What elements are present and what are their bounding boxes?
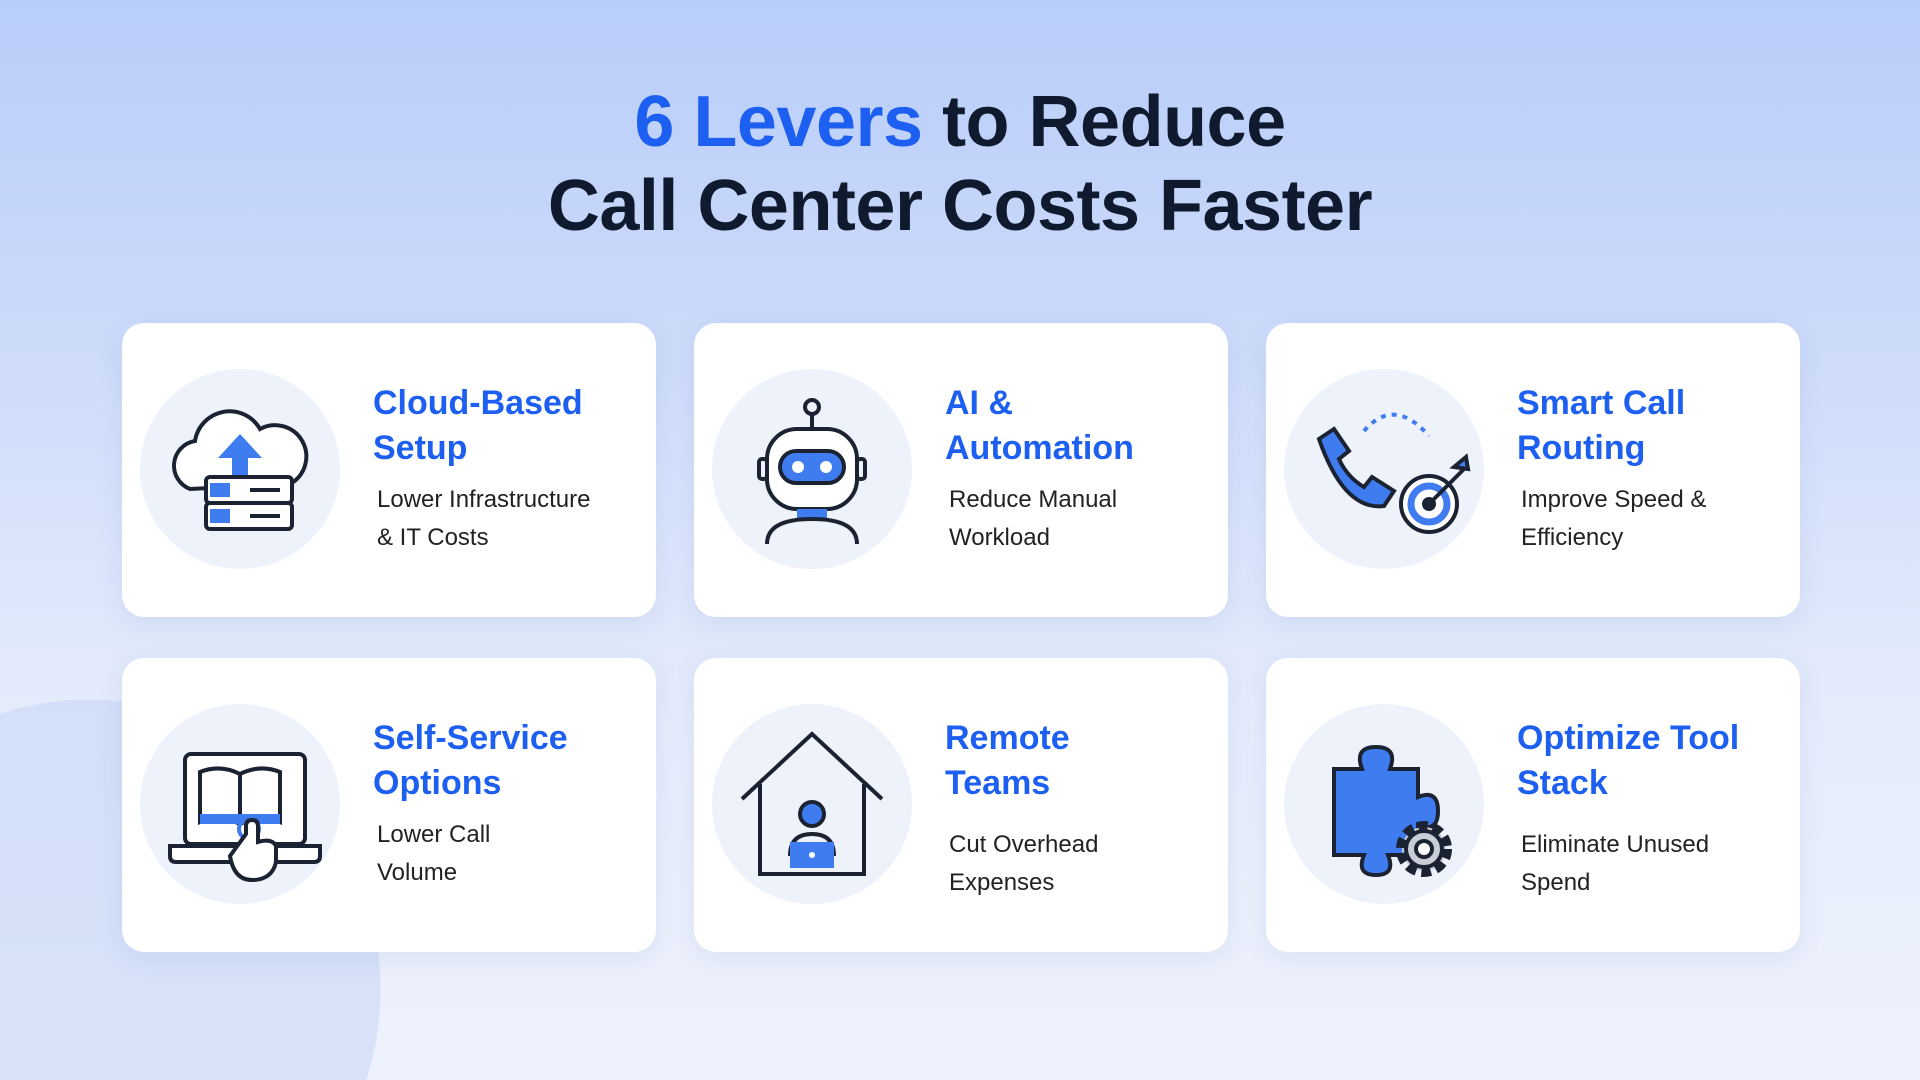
- heading: [373, 719, 568, 802]
- heading: Automation: [945, 429, 1134, 467]
- heading: Setup: [373, 429, 467, 467]
- text: Volume: [377, 859, 457, 886]
- text: & IT Costs: [377, 524, 489, 551]
- heading: [945, 384, 1134, 467]
- title: 6 Levers to Reduce: [634, 82, 1286, 162]
- heading: Routing: [1517, 429, 1645, 467]
- heading: Cloud-Based: [373, 384, 583, 422]
- text: Eliminate Unused: [1521, 831, 1709, 858]
- heading: AI &: [945, 384, 1013, 422]
- icon: house with worker: [712, 704, 912, 904]
- icon: robot: [712, 369, 912, 569]
- text: Workload: [949, 524, 1050, 551]
- text: Cut Overhead: [949, 831, 1098, 858]
- panel: optimize tool stack: [1266, 658, 1800, 952]
- heading: Teams: [945, 764, 1050, 802]
- heading: Stack: [1517, 764, 1608, 802]
- title: [548, 82, 1372, 246]
- heading: Self-Service: [373, 719, 568, 757]
- text: Spend: [1521, 869, 1590, 896]
- heading: [945, 719, 1070, 802]
- heading: Optimize Tool: [1517, 719, 1739, 757]
- heading: [1517, 719, 1739, 802]
- heading: Remote: [945, 719, 1070, 757]
- panel: self-service: [122, 658, 656, 952]
- text: [377, 821, 490, 886]
- heading: [373, 384, 583, 467]
- panel: smart call routing: [1266, 323, 1800, 617]
- text: Lower Call: [377, 821, 490, 848]
- text: [949, 486, 1117, 551]
- text: [949, 831, 1098, 896]
- panel: remote teams: [694, 658, 1228, 952]
- icon: laptop book: [140, 704, 340, 904]
- icon: puzzle and gear: [1284, 704, 1484, 904]
- heading: [1517, 384, 1685, 467]
- panel: cloud-based setup: [122, 323, 656, 617]
- text: Improve Speed &: [1521, 486, 1706, 513]
- text: Reduce Manual: [949, 486, 1117, 513]
- text: Expenses: [949, 869, 1054, 896]
- text: [1521, 831, 1709, 896]
- icon: phone and target: [1284, 369, 1484, 569]
- icon: cloud server: [140, 369, 340, 569]
- panel: AI & automation: [694, 323, 1228, 617]
- heading: Options: [373, 764, 501, 802]
- text: Lower Infrastructure: [377, 486, 590, 513]
- text: [377, 486, 590, 551]
- text: Efficiency: [1521, 524, 1623, 551]
- text: [1521, 486, 1706, 551]
- heading: Smart Call: [1517, 384, 1685, 422]
- title: Call Center Costs Faster: [548, 166, 1372, 246]
